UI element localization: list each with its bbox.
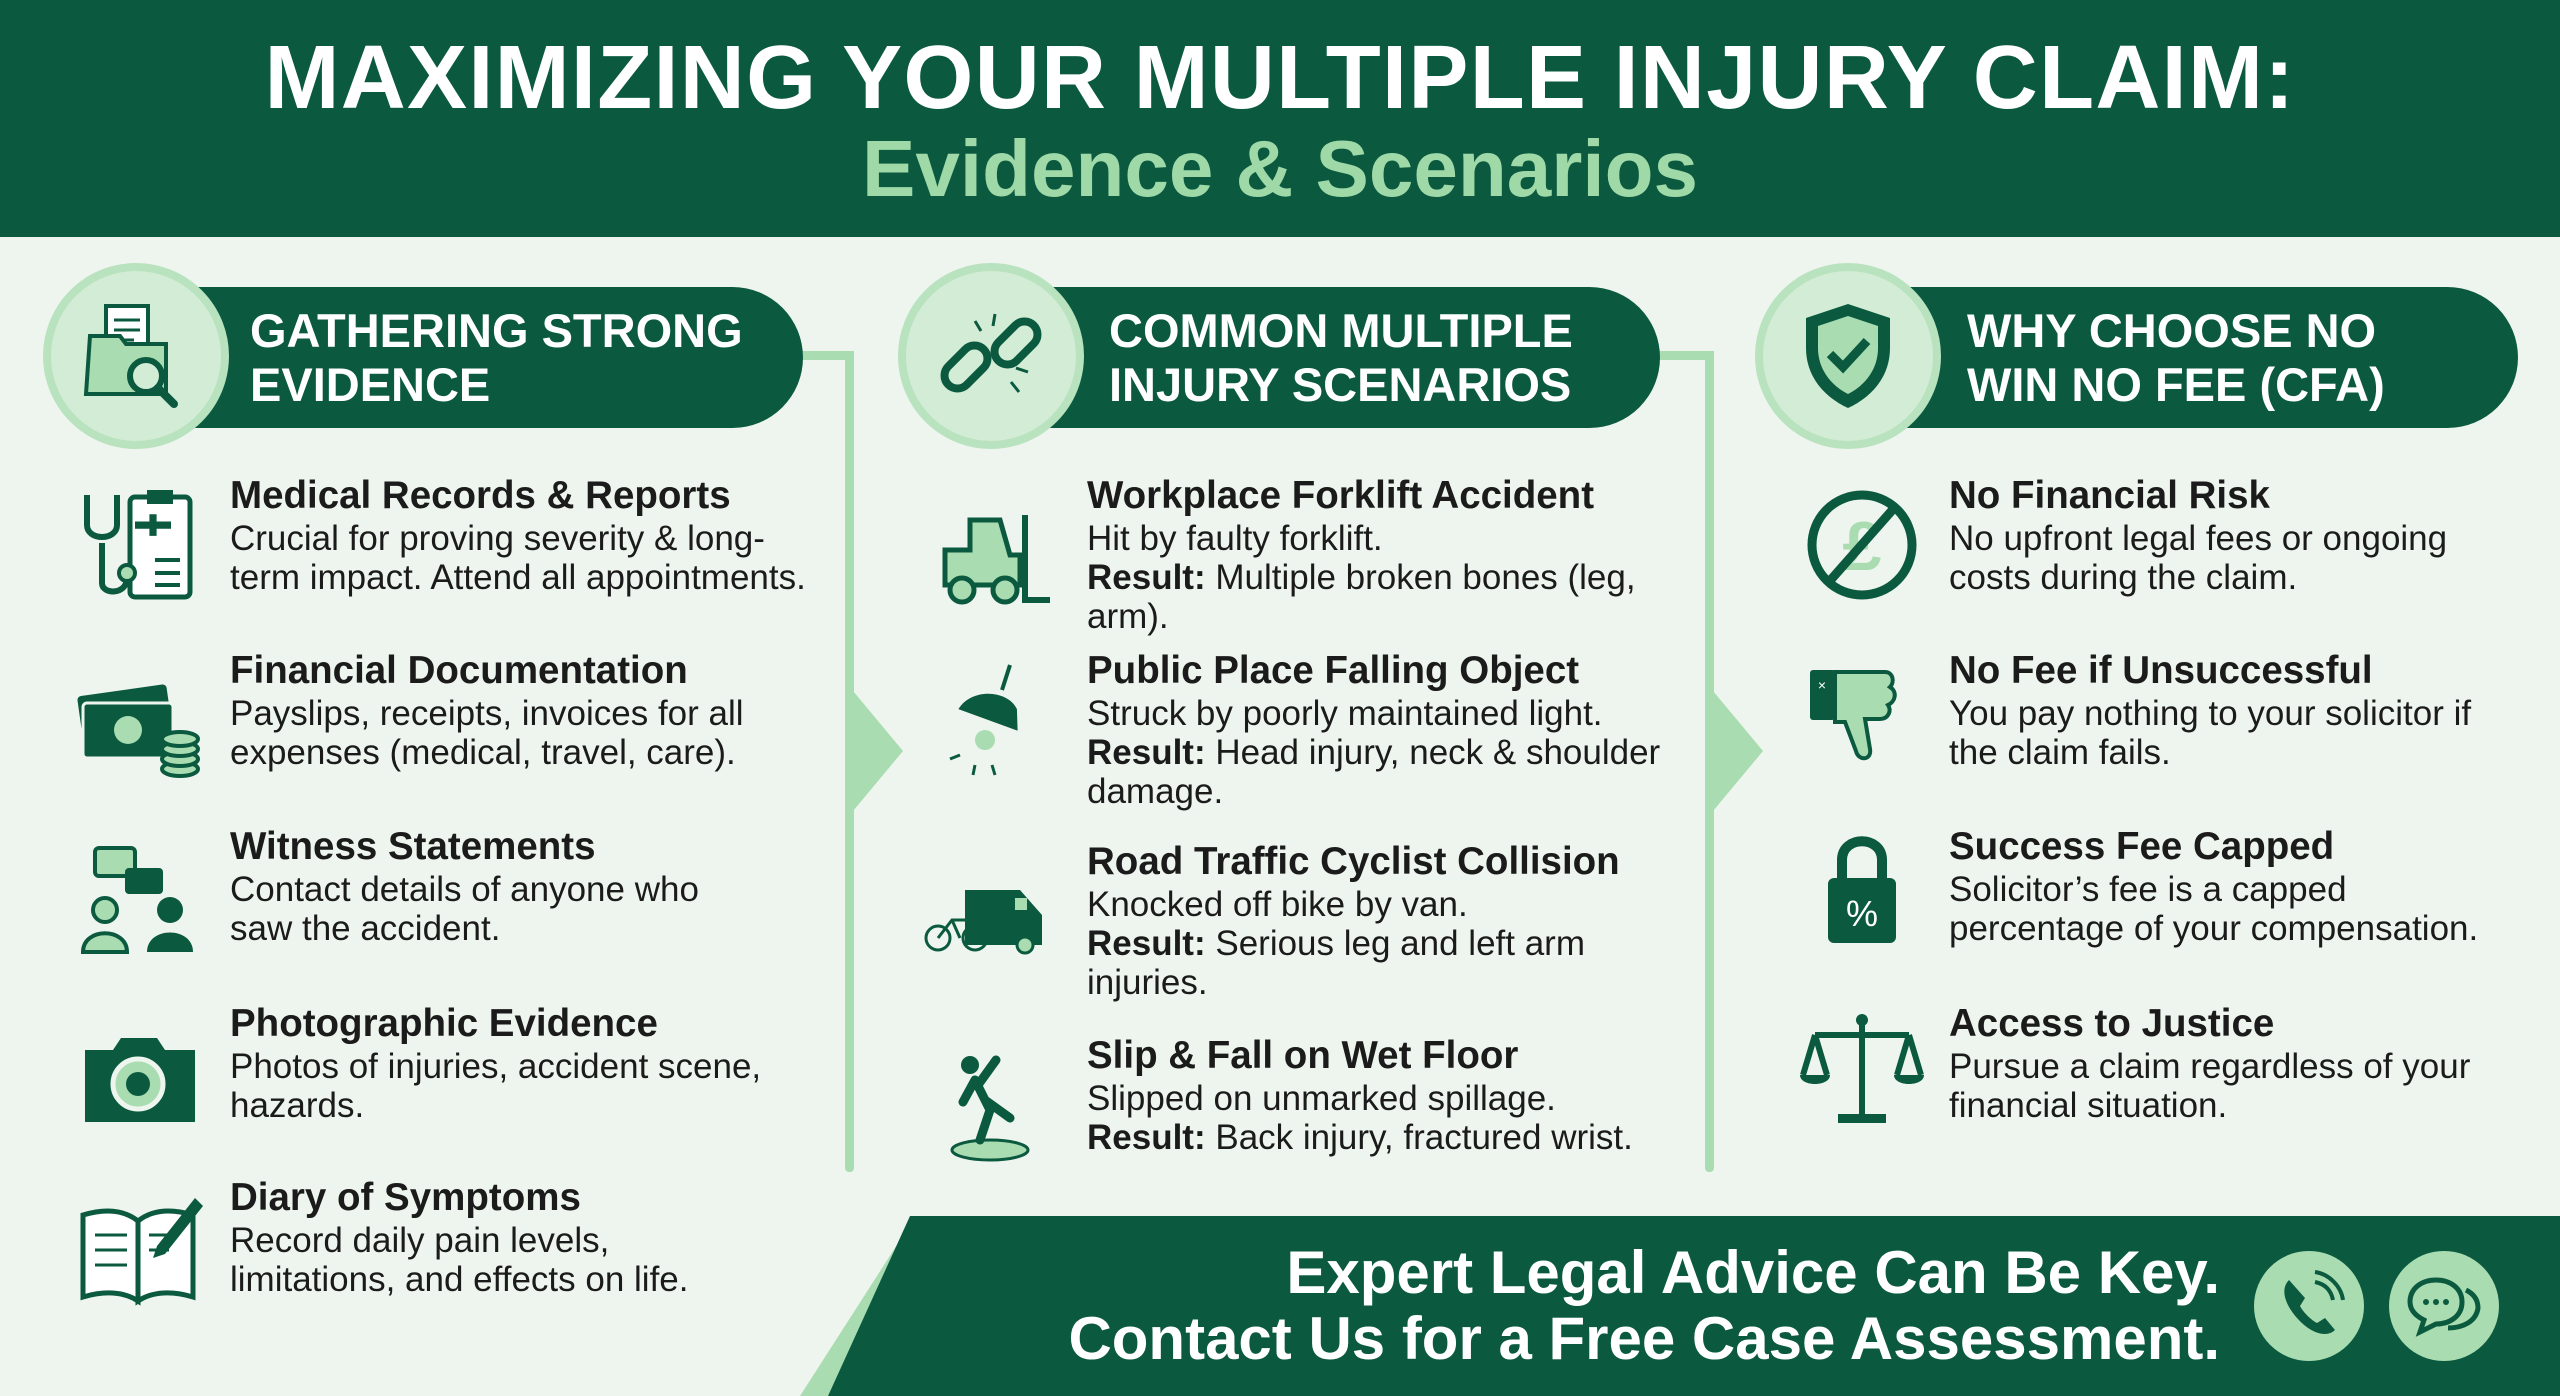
- item: success fee capped: [1949, 825, 2478, 948]
- item: falling object: Public Place Falling Object: [1087, 649, 1579, 692]
- item: slip and fall: Slipped on unmarked spillage.: [1087, 1079, 1556, 1118]
- item: no financial risk: No upfront legal fees or ongoing: [1949, 519, 2447, 558]
- icon: cash and coins: [78, 684, 200, 778]
- item: forklift: arm).: [1087, 597, 1169, 636]
- item: witness statements: Contact details of anyone who: [230, 870, 699, 909]
- icon: no pound: £: [1843, 507, 1882, 585]
- item: forklift: Hit by faulty forklift.: [1087, 519, 1383, 558]
- panel header: no win no fee: [1880, 287, 2518, 428]
- icon: folder with magnifier: [43, 263, 229, 449]
- item: falling object: Result: Head injury, neck & shoulder: [1087, 733, 1660, 772]
- footer call to action: Expert Legal Advice Can Be Key.: [1286, 1239, 2220, 1306]
- item: falling object: [1087, 649, 1660, 811]
- panel header: scenarios: [1023, 287, 1660, 428]
- arrow chevron col2: [1713, 691, 1763, 811]
- column 3: why no win no fee: [1800, 474, 2478, 1125]
- icon: broken chain: [898, 263, 1084, 449]
- item: no financial risk: costs during the claim.: [1949, 558, 2297, 597]
- item: slip and fall: [1087, 1034, 1633, 1157]
- panel header: no win no fee: WIN NO FEE (CFA): [1967, 358, 2385, 411]
- footer call to action: Contact Us for a Free Case Assessment.: [1068, 1305, 2220, 1372]
- item: no financial risk: No Financial Risk: [1949, 474, 2270, 517]
- connector line col1: [845, 351, 854, 1172]
- item: no fee if unsuccessful: the claim fails.: [1949, 733, 2171, 772]
- item: success fee capped: Success Fee Capped: [1949, 825, 2334, 868]
- item: diary: limitations, and effects on life.: [230, 1260, 688, 1299]
- subtitle: Evidence & Scenarios: [862, 124, 1698, 213]
- item: success fee capped: Solicitor’s fee is a capped: [1949, 870, 2347, 909]
- item: falling object: Struck by poorly maintained light.: [1087, 694, 1603, 733]
- item: medical records: Crucial for proving severity & long-: [230, 519, 765, 558]
- connector line col2: [1705, 351, 1714, 1172]
- item: medical records: [230, 474, 806, 597]
- item: diary: Record daily pain levels,: [230, 1221, 609, 1260]
- footer call to action: [1068, 1239, 2220, 1372]
- item: falling object: damage.: [1087, 772, 1223, 811]
- item: cyclist collision: Road Traffic Cyclist Collision: [1087, 840, 1620, 883]
- header band: [0, 0, 2560, 237]
- item: cyclist collision: injuries.: [1087, 963, 1208, 1002]
- icon: no pound: [1808, 490, 1916, 600]
- item: success fee capped: percentage of your compensation.: [1949, 909, 2478, 948]
- item: financial documentation: [230, 649, 744, 772]
- item: medical records: Medical Records & Reports: [230, 474, 731, 517]
- item: photographic evidence: Photographic Evidence: [230, 1002, 658, 1045]
- item: photographic evidence: [230, 1002, 761, 1125]
- icon: chat: [2389, 1251, 2499, 1361]
- panel header: no win no fee: WHY CHOOSE NO: [1967, 304, 2376, 357]
- item: diary: Diary of Symptoms: [230, 1176, 581, 1219]
- panel header: scenarios: COMMON MULTIPLE: [1109, 304, 1573, 357]
- icon: falling lamp: [950, 664, 1018, 776]
- item: access to justice: Access to Justice: [1949, 1002, 2274, 1045]
- arrow chevron col1: [853, 691, 903, 811]
- panel header: gathering evidence: [163, 287, 803, 428]
- item: diary: [230, 1176, 688, 1299]
- panel header: scenarios: INJURY SCENARIOS: [1109, 358, 1571, 411]
- title: MAXIMIZING YOUR MULTIPLE INJURY CLAIM:: [264, 28, 2296, 128]
- item: cyclist collision: Result: Serious leg and left arm: [1087, 924, 1585, 963]
- footer stripe: [800, 1216, 2560, 1396]
- icon: padlock percent: %: [1846, 893, 1878, 934]
- item: access to justice: [1949, 1002, 2470, 1125]
- item: witness statements: Witness Statements: [230, 825, 596, 868]
- item: no financial risk: [1949, 474, 2447, 597]
- item: medical records: term impact. Attend all appointments.: [230, 558, 806, 597]
- icon: witnesses: [81, 846, 193, 954]
- item: forklift: Result: Multiple broken bones (leg,: [1087, 558, 1636, 597]
- column 1: evidence items: [78, 474, 806, 1306]
- item: financial documentation: Payslips, receipts, invoices for all: [230, 694, 744, 733]
- item: financial documentation: expenses (medical, travel, care).: [230, 733, 736, 772]
- icon: van and bike: [924, 890, 1042, 954]
- item: access to justice: Pursue a claim regardless of your: [1949, 1047, 2470, 1086]
- item: photographic evidence: Photos of injuries, accident scene,: [230, 1047, 761, 1086]
- icon: thumbs down: [1810, 670, 1897, 760]
- item: witness statements: saw the accident.: [230, 909, 500, 948]
- item: cyclist collision: [1087, 840, 1620, 1002]
- icon: padlock percent: [1828, 836, 1896, 943]
- icon: open book with pen: [80, 1198, 203, 1306]
- panel header: gathering evidence: GATHERING STRONG: [250, 304, 743, 357]
- icon: forklift: [942, 515, 1050, 604]
- item: forklift: [1087, 474, 1636, 636]
- item: no fee if unsuccessful: You pay nothing to your solicitor if: [1949, 694, 2471, 733]
- item: slip and fall: Result: Back injury, fractured wrist.: [1087, 1118, 1633, 1157]
- item: witness statements: [230, 825, 699, 948]
- item: financial documentation: Financial Documentation: [230, 649, 688, 692]
- item: cyclist collision: Knocked off bike by van.: [1087, 885, 1468, 924]
- icon: camera: [85, 1038, 195, 1122]
- item: photographic evidence: hazards.: [230, 1086, 364, 1125]
- item: no fee if unsuccessful: No Fee if Unsuccessful: [1949, 649, 2373, 692]
- icon: phone: [2254, 1251, 2364, 1361]
- item: no fee if unsuccessful: [1949, 649, 2472, 772]
- icon: slipping person: [950, 1056, 1030, 1162]
- icon: scales of justice: [1800, 1014, 1924, 1123]
- item: access to justice: financial situation.: [1949, 1086, 2227, 1125]
- item: forklift: Workplace Forklift Accident: [1087, 474, 1594, 517]
- panel header: gathering evidence: EVIDENCE: [250, 358, 490, 411]
- column 2: scenarios: [924, 474, 1660, 1162]
- icon: stethoscope clipboard: [84, 490, 192, 600]
- icon: shield check: [1755, 263, 1941, 449]
- item: slip and fall: Slip & Fall on Wet Floor: [1087, 1034, 1518, 1077]
- icon: thumbs down: ×: [1818, 677, 1826, 693]
